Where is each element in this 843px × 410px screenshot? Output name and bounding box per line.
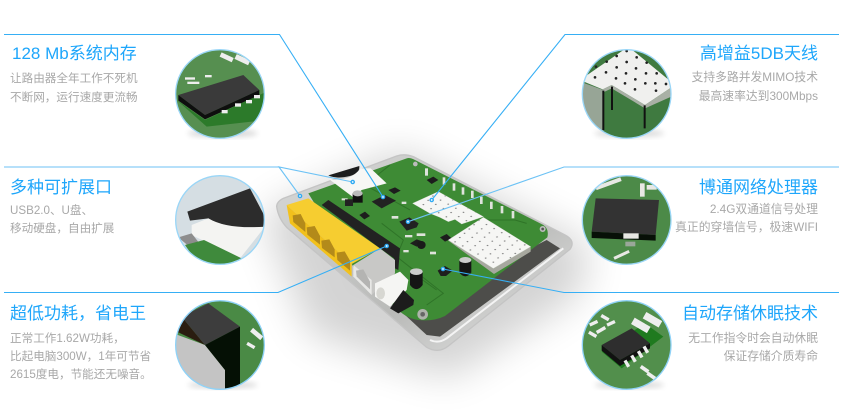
callout line: memory xyxy=(4,34,383,197)
description: 支持多路并发MIMO技术 xyxy=(692,70,818,84)
description: USB2.0、U盘、 xyxy=(10,203,93,217)
ethernet sockets xyxy=(293,214,350,271)
description: 2615度电，节能还无噪音。 xyxy=(10,367,152,381)
callout line: processor xyxy=(408,167,839,222)
antenna plate one xyxy=(413,192,483,224)
small board components xyxy=(342,168,514,254)
green circuit board xyxy=(308,158,548,320)
heading: 博通网络处理器 xyxy=(699,178,818,197)
storage chip xyxy=(438,266,453,276)
icon: storage chip circle xyxy=(580,298,673,392)
panel: memory xyxy=(10,44,267,140)
description: 正常工作1.62W功耗， xyxy=(10,332,125,345)
heading: 高增益5DB天线 xyxy=(700,44,818,63)
top chips xyxy=(359,177,452,247)
capacitors xyxy=(345,190,471,289)
description: 让路由器全年工作不死机 xyxy=(10,71,138,85)
panel: network processor xyxy=(580,173,818,267)
callout line: storage xyxy=(443,269,839,292)
icon: antenna plate circle xyxy=(580,47,675,142)
grey ethernet port xyxy=(353,248,395,295)
panel: antenna xyxy=(580,44,818,142)
description: 保证存储介质寿命 xyxy=(724,349,818,363)
circuit traces xyxy=(365,165,527,305)
panel: low power xyxy=(10,298,267,392)
description: 2.4G双通道信号处理 xyxy=(710,202,818,216)
icon: processor chip circle xyxy=(580,173,673,267)
icon: memory chip circle xyxy=(173,47,267,140)
heading: 128 Mb系统内存 xyxy=(12,44,137,63)
USB port white block xyxy=(329,168,387,197)
icon: power component circle xyxy=(173,298,267,392)
dark lower tray xyxy=(403,240,560,337)
callout line: antenna xyxy=(432,34,839,200)
network processor chip xyxy=(399,217,419,231)
panel: expansion ports xyxy=(10,173,267,267)
description: 真正的穿墙信号，极速WIFI xyxy=(675,220,818,234)
case inner rim xyxy=(430,248,563,342)
description: 不断网，运行速度更流畅 xyxy=(10,90,138,104)
heading: 自动存储休眠技术 xyxy=(682,304,818,323)
yellow ethernet block xyxy=(287,198,380,277)
black component bar xyxy=(322,200,400,270)
black switch xyxy=(390,290,414,313)
USB port crescent xyxy=(328,166,359,178)
description: 无工作指令时会自动休眠 xyxy=(688,331,818,345)
icon: USB port circle xyxy=(173,173,267,267)
description: 比起电脑300W，1年可节省 xyxy=(10,349,151,363)
panel: auto sleep storage xyxy=(580,298,818,392)
antenna plate two xyxy=(448,217,531,274)
heading: 超低功耗，省电王 xyxy=(10,304,146,323)
router illustration xyxy=(277,155,572,350)
callout line: low power xyxy=(4,246,387,292)
router clear case xyxy=(277,155,572,350)
heading: 多种可扩展口 xyxy=(10,178,112,197)
memory chip xyxy=(372,195,396,208)
description: 移动硬盘，自由扩展 xyxy=(10,221,115,235)
white power socket xyxy=(375,272,408,307)
description: 最高速率达到300Mbps xyxy=(699,89,818,103)
callout end dots xyxy=(298,180,445,271)
callout line: USB ports xyxy=(4,167,353,196)
board mounting holes xyxy=(413,162,546,320)
